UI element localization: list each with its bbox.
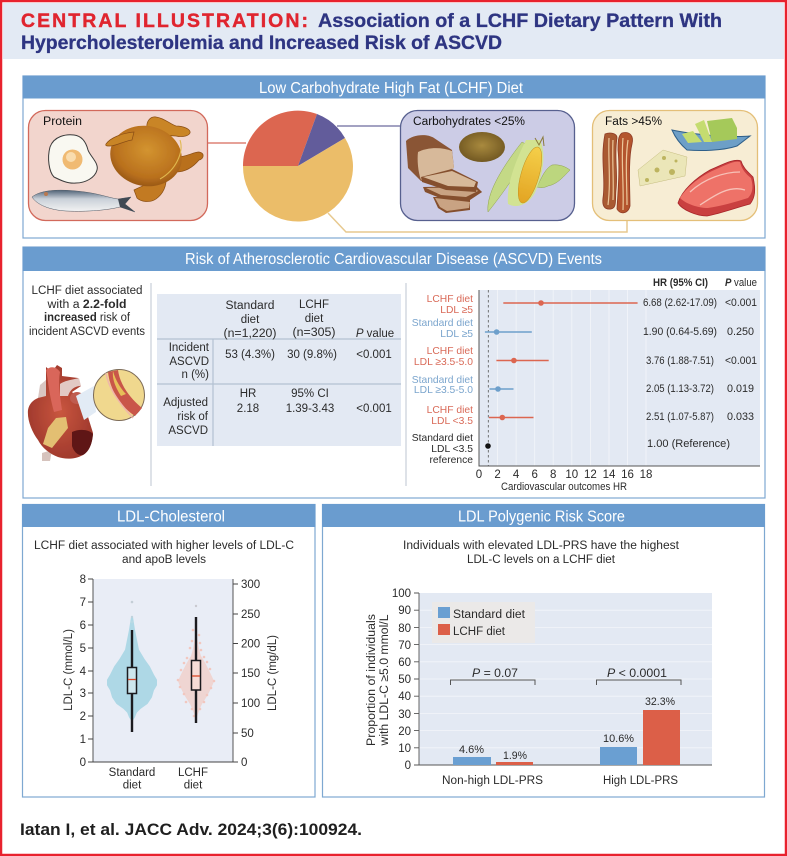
panel: LCHF diet [22, 76, 766, 238]
title banner [3, 3, 784, 59]
table row: incident ASCVD: n (%) [182, 369, 209, 381]
right axis labels [241, 579, 260, 769]
title banner: Hypercholesterolemia and Increased Risk of ASCVD [21, 32, 502, 54]
icon: roast chicken [105, 117, 203, 202]
category labels: Non-high LDL-PRS [442, 775, 543, 787]
panel heading: LDL-Cholesterol: LDL-Cholesterol [117, 508, 225, 526]
left axis labels: 3 [80, 688, 86, 700]
panel heading: ASCVD events: Risk of Atherosclerotic Cardiovascular Disease (ASCVD) Events [185, 251, 602, 268]
forest plot row labels: LCHF diet [427, 294, 473, 305]
text block: LDL-C finding: LCHF diet associated with higher levels of LDL-C [34, 540, 294, 552]
table row: incident ASCVD: ASCVD [169, 356, 209, 368]
right axis labels: 100 [241, 698, 260, 710]
icon: bacon [603, 133, 633, 213]
table row: adjusted risk: 1.39-3.43 [286, 403, 334, 415]
y axis title [366, 614, 391, 747]
forest plot row labels [412, 294, 473, 466]
table row: adjusted risk: risk of [177, 411, 209, 423]
food box: fats [592, 110, 758, 220]
left axis labels: 0 [80, 757, 86, 769]
forest plot axis: 2 [494, 469, 501, 481]
connector: pie to carbohydrates [337, 125, 400, 127]
y axis labels [392, 588, 411, 772]
forest plot hazard ratios [643, 277, 757, 450]
table row: adjusted risk: ASCVD [168, 425, 208, 437]
bars: non-high LDL-PRS: 4.6% [459, 744, 484, 756]
table row: adjusted risk [163, 388, 392, 437]
right axis labels: 50 [241, 728, 254, 740]
table row: adjusted risk: 95% CI [291, 388, 329, 400]
forest plot row labels: reference [429, 455, 473, 466]
significance bracket: non-high [450, 668, 535, 685]
icon: fish [32, 190, 135, 212]
table header: (n=1,220) [224, 328, 277, 340]
left axis labels: 1 [80, 734, 86, 746]
panel: LDL-Cholesterol [22, 504, 316, 797]
table row: adjusted risk: HR [240, 388, 256, 400]
forest plot hazard ratios: 0.250 [727, 326, 754, 338]
table row: incident ASCVD [169, 342, 392, 381]
bars: non-high LDL-PRS: 1.9% [503, 750, 527, 762]
y axis labels: 60 [398, 657, 411, 669]
forest plot axis: 6 [531, 469, 538, 481]
table header [224, 299, 394, 340]
y axis labels: 50 [398, 674, 411, 686]
forest plot axis: 4 [513, 469, 520, 481]
bars: high LDL-PRS: 10.6% [603, 733, 634, 745]
food box: fats: Fats >45% [605, 116, 662, 128]
forest plot rows [485, 303, 638, 418]
icon: butter dish [672, 118, 750, 151]
forest plot row labels: Standard diet [412, 318, 473, 329]
forest plot points [485, 300, 544, 449]
forest plot hazard ratios: <0.001 [725, 297, 757, 309]
icon: bread [406, 135, 482, 213]
box plot: standard diet [128, 630, 136, 732]
forest plot row labels: LDL ≥5 [440, 329, 473, 340]
table row: adjusted risk: <0.001 [356, 403, 392, 415]
citation: Iatan I, et al. JACC Adv. 2024;3(6):100924. [20, 820, 362, 839]
food box: carbohydrates: Carbohydrates <25% [413, 116, 525, 128]
forest plot row labels: Standard diet [412, 375, 473, 386]
violin chart [63, 574, 279, 792]
forest plot row labels: LDL <3.5 [431, 416, 473, 427]
table header: LCHF [299, 299, 329, 311]
right axis labels: 300 [241, 579, 260, 591]
right axis labels: 0 [241, 757, 247, 769]
text block: 2.2-fold risk: LCHF diet associated [32, 285, 142, 297]
forest plot row labels: LDL ≥3.5-5.0 [414, 357, 473, 368]
forest plot row labels: LCHF diet [427, 405, 473, 416]
forest plot axis: 8 [550, 469, 556, 481]
food box: protein: Protein [43, 116, 82, 128]
left axis labels: 6 [80, 620, 86, 632]
food box: protein [28, 110, 208, 220]
table row: adjusted risk: 2.18 [237, 403, 259, 415]
forest plot row labels: LDL ≥5 [440, 305, 473, 316]
category labels [442, 775, 678, 787]
legend: Standard diet [453, 609, 526, 621]
text block: LDL-C finding [34, 540, 294, 566]
left axis labels: 5 [80, 643, 86, 655]
y axis title: with LDL-C ≥5.0 mmol/L [379, 614, 391, 747]
text block: PRS finding [403, 540, 680, 566]
forest plot axis: 12 [584, 469, 597, 481]
table header: P value [356, 328, 394, 340]
table row: adjusted risk: Adjusted [163, 397, 208, 409]
forest plot row labels: LCHF diet [427, 346, 473, 357]
legend: LCHF diet [453, 626, 506, 638]
table header: (n=305) [292, 327, 336, 339]
y axis labels: 20 [398, 726, 411, 738]
connector: pie to protein [208, 142, 246, 144]
connector: pie to fats [328, 213, 627, 232]
icon: cheese [638, 150, 687, 186]
icon: heart with plaque [28, 365, 144, 461]
table row: incident ASCVD: Incident [169, 342, 210, 354]
forest plot hazard ratios: <0.001 [725, 355, 757, 367]
forest plot row labels: LDL ≥3.5-5.0 [414, 385, 473, 396]
forest plot hazard ratios: 0.019 [727, 383, 754, 395]
category labels: Standard [109, 767, 155, 779]
left axis labels: 2 [80, 711, 86, 723]
table header: Standard [226, 300, 274, 312]
y axis labels: 0 [405, 760, 411, 772]
food box: carbohydrates [400, 110, 574, 220]
table row: incident ASCVD: <0.001 [356, 349, 392, 361]
forest plot hazard ratios: 0.033 [727, 411, 754, 423]
category labels: LCHF [178, 767, 208, 779]
left axis labels: 7 [80, 597, 86, 609]
violin: LCHF diet [177, 605, 215, 720]
box plot: LCHF diet [192, 617, 200, 723]
table header: diet [305, 313, 324, 325]
y axis labels: 80 [398, 623, 411, 635]
text block: 2.2-fold risk: with a 2.2-fold [46, 299, 126, 311]
y axis labels: 90 [398, 605, 411, 617]
significance bracket: high [596, 668, 681, 685]
bars: non-high LDL-PRS [453, 744, 533, 765]
category labels: diet [184, 780, 203, 792]
violin: standard diet [108, 601, 156, 720]
table: incident ASCVD [157, 294, 401, 446]
forest plot hazard ratios: 2.05 (1.13-3.72) [646, 383, 714, 395]
significance bracket: high: P < 0.0001 [607, 668, 667, 680]
category labels: diet [123, 780, 142, 792]
y axis labels: 100 [392, 588, 411, 600]
icon: fried egg [49, 135, 97, 183]
forest plot hazard ratios: HR (95% CI) [653, 277, 708, 289]
left axis title: LDL-C (mmol/L) [63, 629, 75, 711]
forest plot axis: Cardiovascular outcomes HR [501, 481, 627, 493]
forest plot row labels: LDL <3.5 [431, 444, 473, 455]
forest plot hazard ratios: 2.51 (1.07-5.87) [646, 411, 714, 423]
table row: incident ASCVD: 30 (9.8%) [287, 349, 337, 361]
icon: corn [488, 137, 570, 212]
right axis labels: 250 [241, 609, 260, 621]
forest plot hazard ratios: P value [725, 277, 757, 289]
forest plot hazard ratios: 1.00 (Reference) [647, 438, 730, 450]
text block: LDL-C finding: and apoB levels [122, 554, 206, 566]
title banner: CENTRAL ILLUSTRATION: [21, 10, 308, 32]
forest plot axis: 10 [565, 469, 578, 481]
forest plot [412, 277, 760, 493]
icon: potato [459, 132, 505, 162]
y axis title: Proportion of individuals [366, 614, 378, 746]
forest plot row labels: Standard diet [412, 433, 473, 444]
y axis labels: 40 [398, 691, 411, 703]
right axis labels: 200 [241, 638, 260, 650]
table header: diet [241, 314, 260, 326]
category labels [109, 767, 208, 792]
text block: 2.2-fold risk: increased risk of [44, 312, 131, 324]
y axis labels: 70 [398, 640, 411, 652]
forest plot axis: 16 [621, 469, 634, 481]
right axis title: LDL-C (mg/dL) [267, 635, 279, 711]
forest plot hazard ratios: 6.68 (2.62-17.09) [643, 297, 717, 309]
bar chart [366, 588, 712, 787]
panel heading: LDL polygenic risk score: LDL Polygenic Risk Score [458, 508, 625, 526]
forest plot axis: 14 [603, 469, 616, 481]
text block: PRS finding: Individuals with elevated LDL-PRS have the highest [403, 540, 680, 552]
icon: steak [678, 160, 755, 216]
table row: incident ASCVD: 53 (4.3%) [225, 349, 275, 361]
text block: 2.2-fold risk [29, 285, 145, 338]
bars: high LDL-PRS: 32.3% [645, 696, 675, 708]
y axis labels: 30 [398, 709, 411, 721]
forest plot axis: 18 [640, 469, 652, 481]
panel heading: LCHF diet: Low Carbohydrate High Fat (LCHF) Diet [259, 80, 524, 97]
text block: 2.2-fold risk: incident ASCVD events [29, 326, 145, 338]
y axis labels: 10 [398, 743, 411, 755]
left axis labels: 8 [80, 574, 86, 586]
forest plot axis: 0 [476, 469, 482, 481]
left axis labels [80, 574, 87, 769]
forest plot hazard ratios: 3.76 (1.88-7.51) [646, 355, 714, 367]
category labels: High LDL-PRS [603, 775, 678, 787]
panel: LDL Polygenic Risk Score [322, 504, 765, 797]
forest plot axis [476, 469, 652, 493]
legend [432, 602, 535, 643]
title banner: Association of a LCHF Dietary Pattern With [318, 10, 722, 32]
forest plot hazard ratios: 1.90 (0.64-5.69) [643, 326, 717, 338]
bars: high LDL-PRS [600, 696, 680, 765]
text block: PRS finding: LDL-C levels on a LCHF diet [467, 554, 616, 566]
left axis labels: 4 [80, 666, 87, 678]
panel: ASCVD events [22, 247, 766, 498]
significance bracket: non-high: P = 0.07 [472, 668, 518, 680]
right axis labels: 150 [241, 668, 260, 680]
pie chart: macronutrient split [243, 111, 353, 222]
